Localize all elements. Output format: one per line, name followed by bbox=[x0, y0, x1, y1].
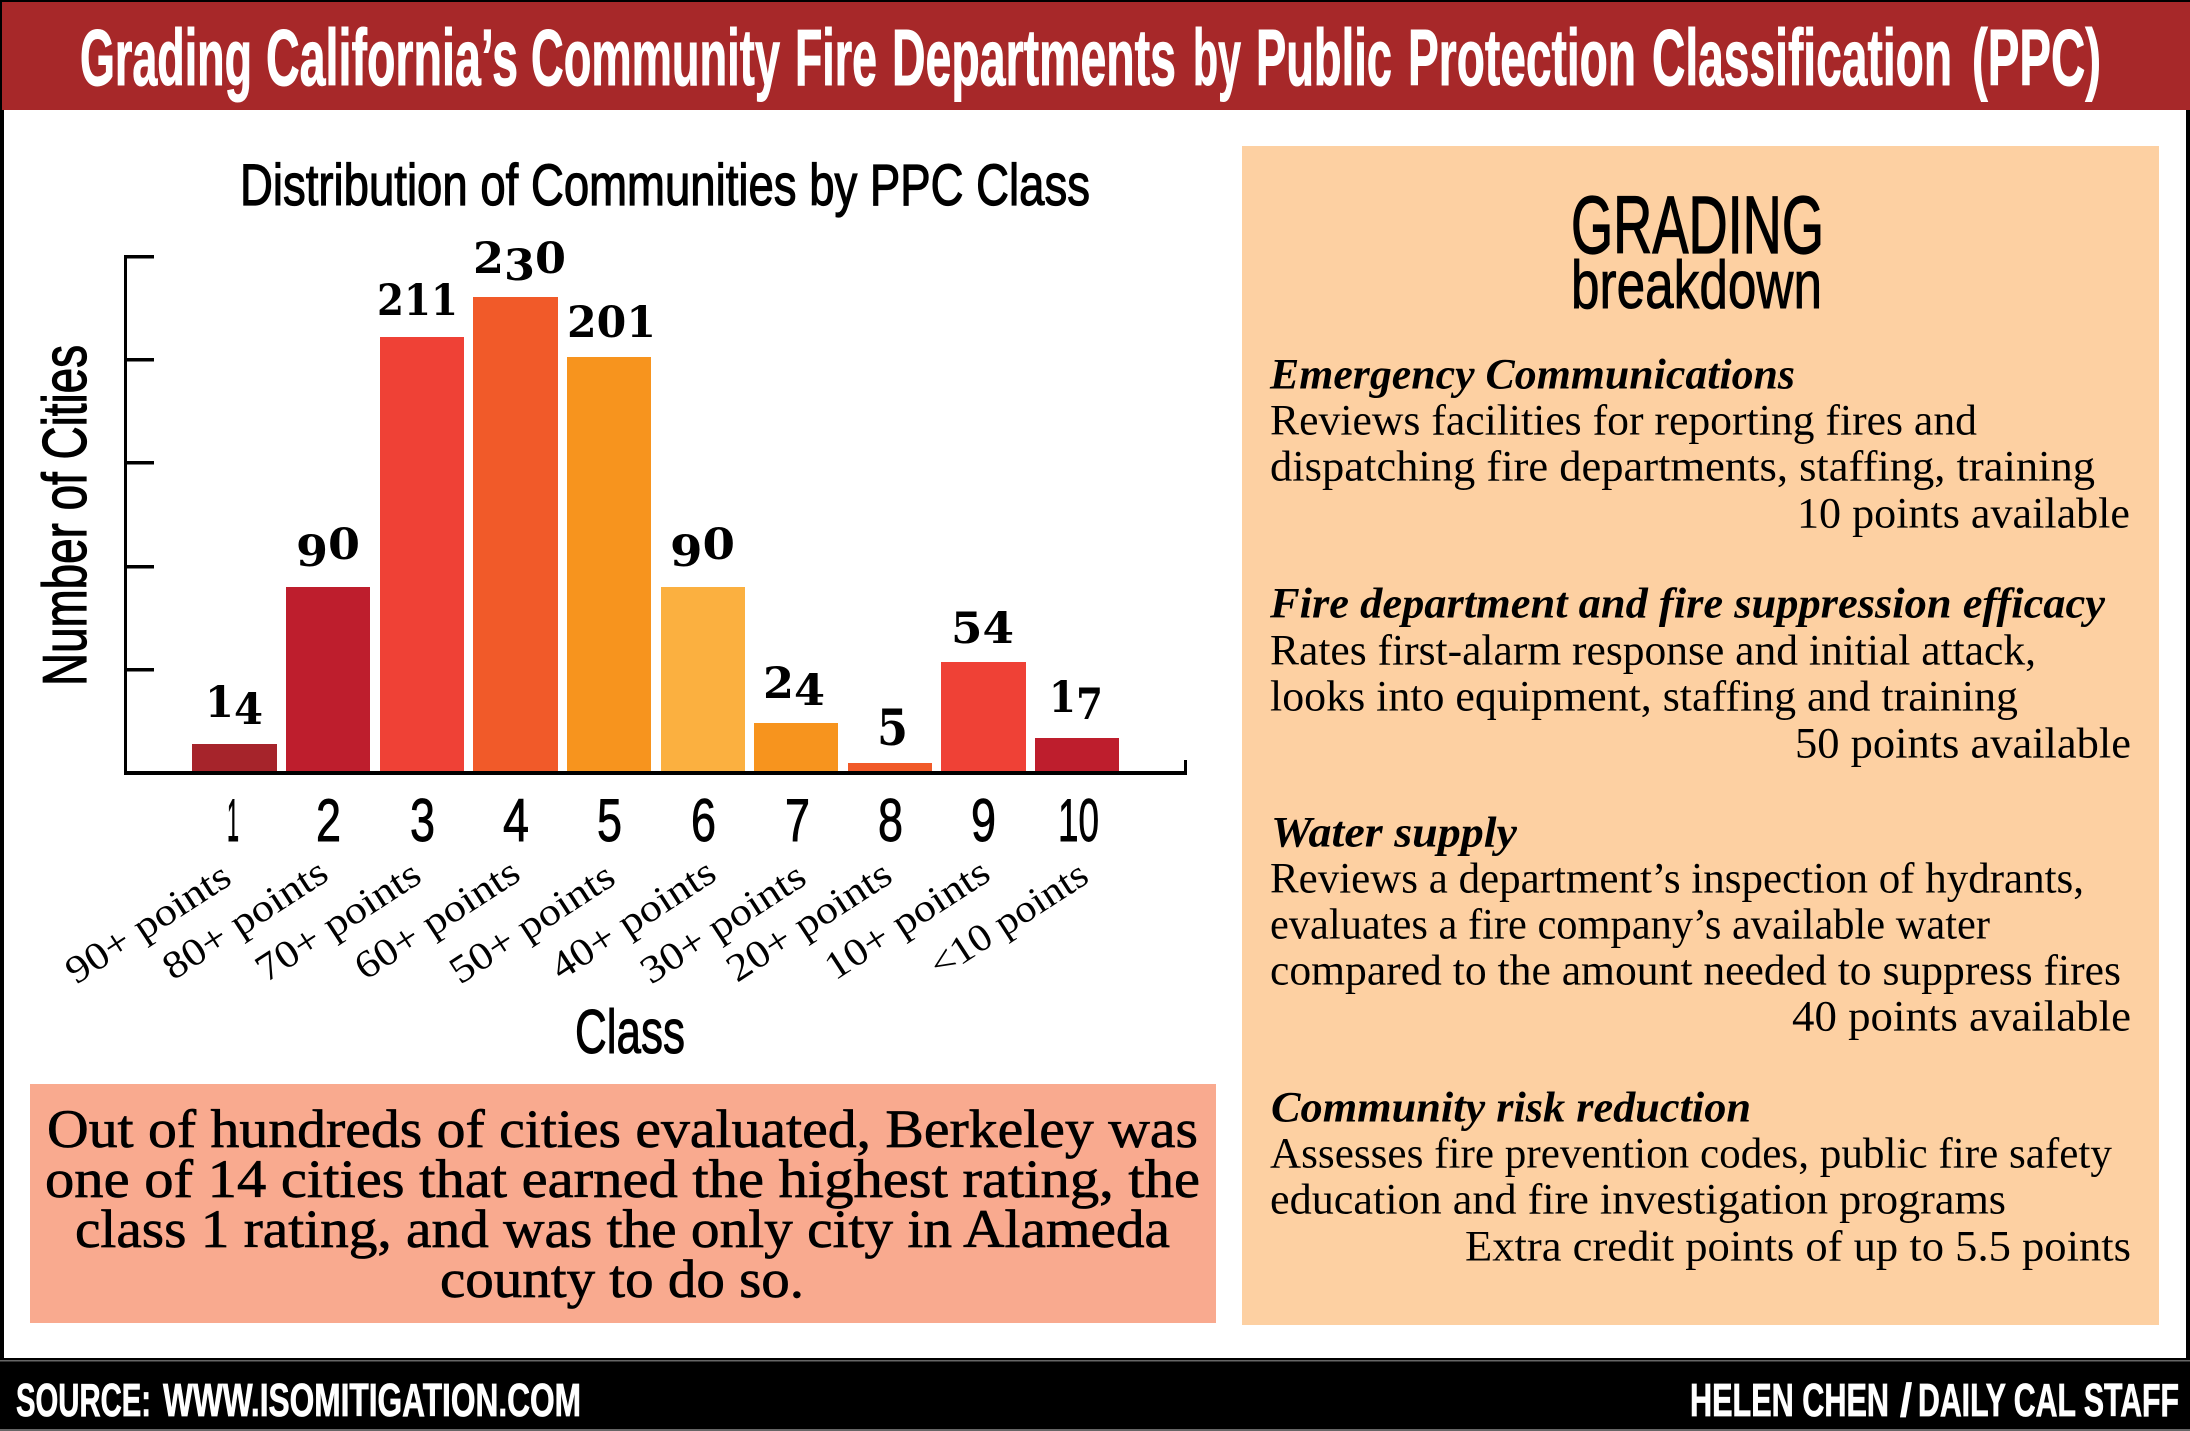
points labels: 50+ points bbox=[441, 854, 623, 993]
points labels: <10 points bbox=[921, 852, 1096, 987]
bar value labels: 4 bbox=[234, 685, 263, 735]
section: water supply: compared to the amount needed to suppress fires bbox=[1270, 948, 2121, 994]
bars bbox=[192, 297, 1119, 771]
bar value labels bbox=[205, 234, 1103, 757]
section: emergency communications: Reviews facilities for reporting fires and bbox=[1270, 398, 1977, 444]
points labels: 40+ points bbox=[542, 850, 724, 989]
section: water supply: 40 points available bbox=[1792, 994, 2131, 1040]
class numbers: 10 bbox=[1058, 787, 1099, 854]
section: emergency communications bbox=[1269, 352, 2130, 538]
bar value labels: 0 bbox=[535, 234, 566, 284]
bar chart bbox=[31, 234, 1187, 1067]
axes bbox=[124, 255, 1187, 775]
bar value labels: 5 bbox=[877, 698, 908, 757]
class numbers: 1 bbox=[227, 787, 239, 854]
callout panel: class 1 rating, and was the only city in Alameda bbox=[75, 1199, 1170, 1259]
class numbers: 8 bbox=[878, 787, 903, 854]
title: (PPC) bbox=[1972, 13, 2101, 102]
class numbers: 6 bbox=[691, 787, 716, 854]
callout panel bbox=[30, 1084, 1216, 1323]
bar value labels: 1 bbox=[205, 678, 235, 728]
panel heading: breakdown bbox=[1571, 247, 1822, 323]
title: Protection bbox=[1408, 13, 1636, 102]
panel heading: GRADING bbox=[1571, 180, 1824, 271]
staff credit: HELEN CHEN bbox=[1690, 1374, 1889, 1426]
title bbox=[80, 13, 2101, 102]
callout panel: county to do so. bbox=[440, 1249, 804, 1309]
section: water supply: evaluates a fire company’s available water bbox=[1270, 902, 1990, 948]
bar value labels: 54 bbox=[951, 604, 1014, 654]
x axis title: Class bbox=[575, 998, 685, 1067]
title: Grading bbox=[80, 13, 252, 102]
title: California’s bbox=[266, 13, 518, 102]
section: fire department: Fire department and fire suppression efficacy bbox=[1269, 580, 2106, 628]
points labels: 20+ points bbox=[718, 852, 900, 991]
title: Classification bbox=[1652, 13, 1952, 102]
points labels: 70+ points bbox=[247, 852, 429, 991]
section: water supply: Reviews a department’s inspection of hydrants, bbox=[1270, 856, 2084, 902]
section: emergency communications: Emergency Communications bbox=[1269, 352, 1795, 398]
section: fire department: looks into equipment, staffing and training bbox=[1270, 674, 2018, 720]
bar value labels: 211 bbox=[377, 276, 458, 326]
title: Fire bbox=[795, 13, 877, 102]
y axis title: Number of Cities bbox=[31, 345, 100, 686]
class numbers: 2 bbox=[316, 787, 341, 854]
source credit: WWW.ISOMITIGATION.COM bbox=[163, 1374, 581, 1426]
title: Departments bbox=[892, 13, 1176, 102]
source credit bbox=[16, 1374, 581, 1426]
title: Public bbox=[1256, 13, 1392, 102]
points labels: 10+ points bbox=[816, 850, 998, 989]
class numbers bbox=[227, 787, 1099, 854]
staff credit: / bbox=[1900, 1374, 1912, 1426]
bar value labels: 3 bbox=[504, 241, 535, 291]
footer bar bbox=[0, 1358, 2190, 1431]
bar value labels: 1 bbox=[1049, 673, 1079, 723]
points labels: 30+ points bbox=[632, 854, 814, 993]
section: fire department: 50 points available bbox=[1795, 720, 2131, 768]
panel: grading breakdown bbox=[1242, 146, 2159, 1325]
section: fire department: Rates first-alarm response and initial attack, bbox=[1270, 628, 2036, 674]
section: community risk reduction: education and fire investigation programs bbox=[1270, 1176, 2006, 1224]
section: community risk reduction: Assesses fire prevention codes, public fire safety bbox=[1270, 1130, 2112, 1178]
section: community risk reduction bbox=[1270, 1084, 2131, 1270]
staff credit bbox=[1690, 1374, 2179, 1426]
section: community risk reduction: Extra credit points of up to 5.5 points bbox=[1465, 1224, 2131, 1270]
title banner bbox=[2, 2, 2190, 110]
points labels bbox=[57, 850, 1096, 993]
bar value labels: 2 bbox=[473, 234, 503, 284]
bar value labels: 201 bbox=[567, 298, 656, 348]
bar value labels: 2 bbox=[763, 659, 793, 709]
bar value labels: 9 bbox=[670, 527, 702, 577]
callout panel: Out of hundreds of cities evaluated, Berkeley was bbox=[47, 1099, 1198, 1159]
source credit: SOURCE: bbox=[16, 1374, 151, 1426]
class numbers: 4 bbox=[503, 787, 529, 854]
class numbers: 9 bbox=[971, 787, 996, 854]
section: water supply bbox=[1270, 810, 2131, 1040]
points labels: 80+ points bbox=[154, 850, 336, 989]
section: emergency communications: 10 points available bbox=[1797, 490, 2130, 538]
section: water supply: Water supply bbox=[1271, 810, 1518, 856]
title: Community bbox=[531, 13, 780, 102]
section: fire department bbox=[1269, 580, 2131, 768]
class numbers: 3 bbox=[410, 787, 435, 854]
section: community risk reduction: Community risk reduction bbox=[1271, 1084, 1751, 1132]
class numbers: 5 bbox=[597, 787, 622, 854]
callout panel: one of 14 cities that earned the highest rating, the bbox=[45, 1149, 1200, 1209]
bar value labels: 0 bbox=[702, 520, 735, 570]
bar value labels: 9 bbox=[296, 527, 328, 577]
points labels: 60+ points bbox=[346, 850, 528, 989]
bar value labels: 7 bbox=[1076, 680, 1103, 730]
title: by bbox=[1193, 13, 1241, 102]
bar value labels: 4 bbox=[794, 666, 825, 716]
points labels: 90+ points bbox=[57, 854, 239, 993]
chart title: Distribution of Communities by PPC Class bbox=[240, 153, 1090, 218]
section: emergency communications: dispatching fire departments, staffing, training bbox=[1270, 444, 2095, 490]
panel heading bbox=[1571, 180, 1824, 323]
class numbers: 7 bbox=[785, 787, 810, 854]
bar value labels: 0 bbox=[328, 520, 360, 570]
